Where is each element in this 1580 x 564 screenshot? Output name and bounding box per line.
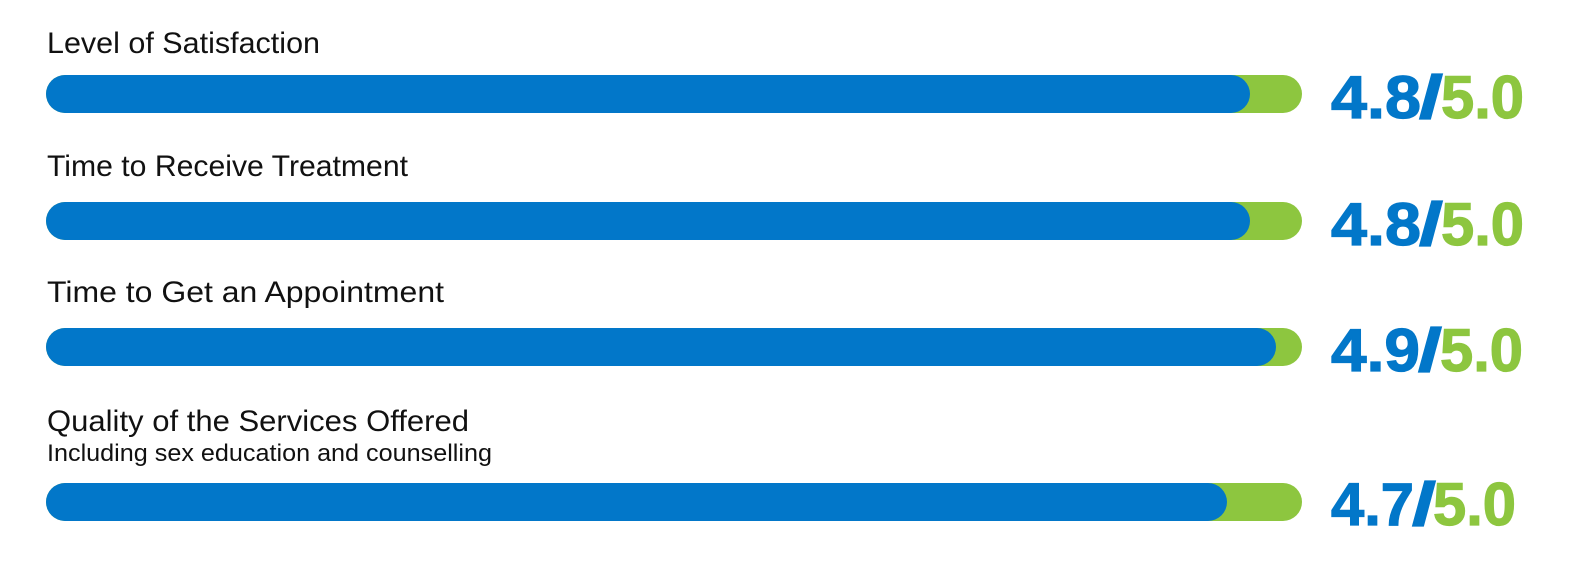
score: 4.8/5.0: 4.8 bbox=[1331, 191, 1421, 258]
score: 4.8/5.0: 5.0 bbox=[1441, 191, 1524, 258]
sublabel: Including sex education and counselling: Including sex education and counselling bbox=[47, 440, 492, 467]
score: 4.9/5.0: 5.0 bbox=[1440, 317, 1523, 384]
bar: 4.8 of 5.0 bbox=[46, 202, 1302, 240]
label: Time to Receive Treatment: Time to Receive Treatment bbox=[47, 150, 409, 183]
label: Level of Satisfaction: Level of Satisfaction bbox=[47, 27, 320, 60]
bar: 4.7 of 5.0 bbox=[46, 483, 1302, 521]
score: 4.8/5.0 bbox=[1331, 64, 1524, 131]
score: 4.8/5.0: / bbox=[1419, 64, 1443, 131]
row: Quality of the Services Offered bbox=[46, 405, 1516, 538]
bar: 4.8 of 5.0 bbox=[46, 75, 1302, 113]
score: 4.7/5.0: 4.7 bbox=[1331, 471, 1414, 538]
row: Level of Satisfaction bbox=[46, 27, 1524, 131]
row: Time to Get an Appointment bbox=[46, 276, 1523, 384]
score: 4.8/5.0 bbox=[1331, 191, 1524, 258]
score: 4.8/5.0: 4.8 bbox=[1331, 64, 1421, 131]
label: Quality of the Services Offered: Quality of the Services Offered bbox=[47, 405, 469, 438]
score: 4.7/5.0: / bbox=[1412, 471, 1436, 538]
score: 4.8/5.0: / bbox=[1419, 191, 1443, 258]
score: 4.7/5.0 bbox=[1331, 471, 1516, 538]
bar: 4.9 of 5.0 bbox=[46, 328, 1302, 366]
row: Time to Receive Treatment bbox=[46, 150, 1524, 258]
score: 4.9/5.0: 4.9 bbox=[1331, 317, 1420, 384]
score: 4.9/5.0: / bbox=[1418, 317, 1442, 384]
score: 4.8/5.0: 5.0 bbox=[1441, 64, 1524, 131]
label: Time to Get an Appointment: Time to Get an Appointment bbox=[47, 276, 445, 309]
score: 4.9/5.0 bbox=[1331, 317, 1523, 384]
score: 4.7/5.0: 5.0 bbox=[1433, 471, 1516, 538]
